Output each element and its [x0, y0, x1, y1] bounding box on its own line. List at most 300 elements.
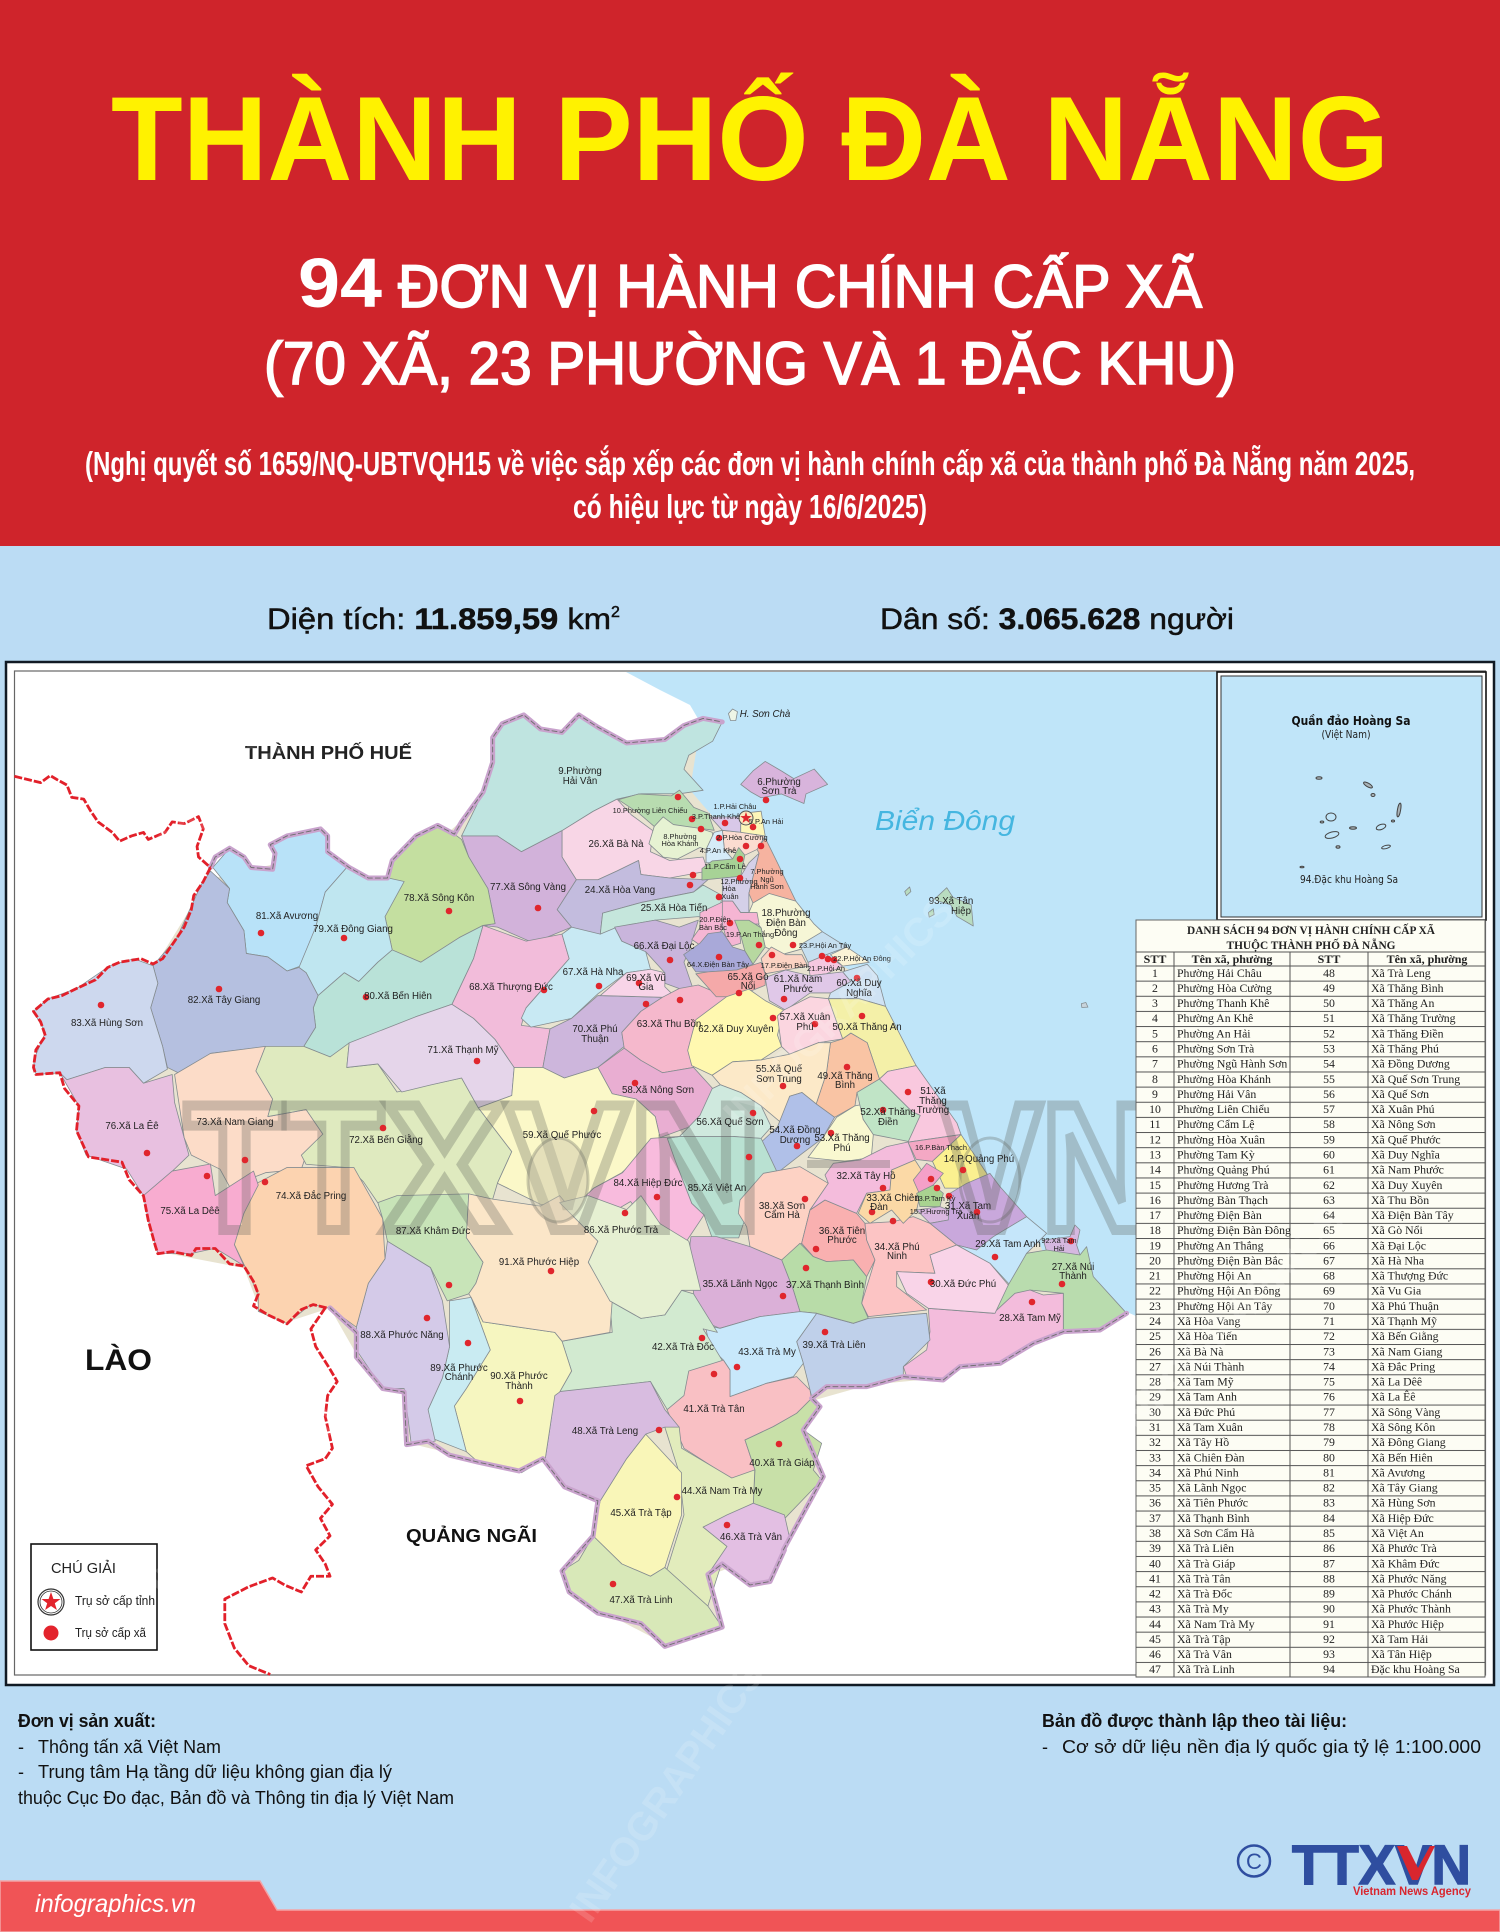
commune labels: Bình: [835, 1080, 855, 1091]
faint watermark: INFOGRAPHICS: INFOGRAPHICS: [1105, 1198, 1353, 1446]
commune labels: Phú: [833, 1143, 851, 1154]
table rows: Phường Hội An Tây: [1177, 1299, 1272, 1313]
table rows: Xã Duy Nghĩa: [1371, 1147, 1441, 1161]
table rows: Xã Phước Thành: [1371, 1602, 1451, 1616]
table rows: 44: [1149, 1617, 1161, 1631]
commune list table: [1136, 920, 1485, 1678]
table rows: Xã Tam Hải: [1371, 1632, 1429, 1646]
commune labels: 43.Xã Trà My: [738, 1347, 796, 1358]
table rows: 47: [1149, 1662, 1161, 1676]
table rows: Xã Núi Thành: [1177, 1359, 1244, 1373]
commune labels: 52.Xã Thăng: [860, 1107, 916, 1118]
commune labels: 63.Xã Thu Bồn: [637, 1019, 701, 1030]
commune labels: 93.Xã Tân: [929, 896, 973, 907]
map source note: -: [1042, 1737, 1048, 1757]
commune labels: Xuân: [721, 892, 739, 901]
table rows: Xã Tây Giang: [1371, 1481, 1438, 1495]
table rows: Xã Avương: [1371, 1465, 1425, 1479]
commune labels: 40.Xã Trà Giáp: [749, 1458, 815, 1469]
subtitle line 2: (70 XÃ, 23 PHƯỜNG VÀ 1 ĐẶC KHU): [264, 330, 1236, 397]
commune labels: 38.Xã Sơn: [759, 1201, 805, 1212]
logo: TTXVN: C: [1246, 1849, 1262, 1874]
table rows: 64: [1323, 1208, 1335, 1222]
table rows: Phường Hội An Đông: [1177, 1284, 1281, 1298]
table rows: 13: [1149, 1147, 1161, 1161]
commune labels: 11.P.Cẩm Lệ: [704, 862, 746, 871]
commune labels: 25.Xã Hòa Tiến: [641, 903, 707, 914]
table rows: Phường Bàn Thạch: [1177, 1193, 1268, 1207]
neighbour labels: QUẢNG NGÃI: [406, 1525, 537, 1546]
table rows: Xã Trà Tân: [1177, 1571, 1231, 1585]
table rows: Xã La Dêê: [1371, 1375, 1422, 1389]
table rows: 15: [1149, 1178, 1161, 1192]
inset: Hoàng Sa archipelago: Quần đảo Hoàng Sa: [1292, 714, 1410, 728]
commune labels: 42.Xã Trà Đốc: [652, 1342, 714, 1353]
table rows: 36: [1149, 1496, 1161, 1510]
table rows: 21: [1149, 1269, 1161, 1283]
table rows: Phường Tam Kỳ: [1177, 1147, 1255, 1161]
watermark: TTXVN: TT: [185, 1067, 383, 1269]
commune labels: 65.Xã Gò: [728, 972, 768, 983]
table rows: 19: [1149, 1238, 1161, 1252]
table rows: 76: [1323, 1390, 1335, 1404]
table rows: Xã Đồng Dương: [1371, 1057, 1450, 1071]
commune labels: 53.Xã Thăng: [814, 1133, 870, 1144]
commune labels: 24.Xã Hòa Vang: [585, 885, 655, 896]
table rows: 24: [1149, 1314, 1161, 1328]
table rows: 4: [1152, 1011, 1158, 1025]
subtitle line 1: ĐƠN VỊ HÀNH CHÍNH CẤP XÃ: [398, 253, 1202, 320]
table rows: Phường Liên Chiểu: [1177, 1102, 1270, 1116]
commune labels: Xuân: [957, 1211, 979, 1222]
legend: Trụ sở cấp tỉnh: [75, 1593, 155, 1608]
commune labels: 18.Phường: [762, 908, 810, 919]
commune labels: Thành: [505, 1381, 533, 1392]
table header row: STT: [1144, 952, 1166, 966]
commune labels: Đàn: [870, 1202, 888, 1213]
inset: Hoàng Sa archipelago: 94.Đặc khu Hoàng Sa: [1300, 874, 1398, 886]
table rows: Xã Thăng Bình: [1371, 981, 1444, 995]
commune labels: 5.P.An Hải: [749, 817, 784, 826]
production credits: Thông tấn xã Việt Nam: [38, 1737, 221, 1757]
watermark: TTXVN: [185, 1067, 1150, 1269]
table rows: Phường Điện Bàn: [1177, 1208, 1262, 1222]
map source note: [1042, 1711, 1481, 1757]
production credits: -: [18, 1737, 24, 1757]
table rows: 40: [1149, 1556, 1161, 1570]
land base silhouette: [35, 727, 1120, 1644]
map source note: Bản đồ được thành lập theo tài liệu:: [1042, 1711, 1347, 1731]
commune labels: 54.Xã Đồng: [769, 1125, 821, 1136]
table rows: Xã Thăng Phú: [1371, 1042, 1439, 1056]
table rows: Xã Quế Sơn Trung: [1371, 1072, 1460, 1086]
commune labels: Sơn Trung: [756, 1074, 802, 1085]
table rows: 79: [1323, 1435, 1335, 1449]
table rows: 84: [1323, 1511, 1335, 1525]
table rows: Xã Hà Nha: [1371, 1253, 1425, 1267]
commune labels: 82.Xã Tây Giang: [188, 995, 260, 1006]
commune labels: 49.Xã Thăng: [817, 1071, 873, 1082]
table rows: Xã Bến Giằng: [1371, 1329, 1439, 1343]
table rows: Phường Hội An: [1177, 1269, 1251, 1283]
commune labels: Bàn Bắc: [699, 923, 727, 932]
commune labels: Cẩm Hà: [764, 1210, 800, 1221]
table rows: Xã Vu Gia: [1371, 1284, 1422, 1298]
legend: [31, 1544, 157, 1650]
commune labels: Hòa Khánh: [662, 839, 698, 848]
table rows: Xã Đông Giang: [1371, 1435, 1446, 1449]
table rows: 45: [1149, 1632, 1161, 1646]
table rows: 78: [1323, 1420, 1335, 1434]
table rows: 63: [1323, 1193, 1335, 1207]
commune labels: 62.Xã Duy Xuyên: [698, 1024, 774, 1035]
table rows: 32: [1149, 1435, 1161, 1449]
production credits: thuộc Cục Đo đạc, Bản đồ và Thông tin địa lý Việt Nam: [18, 1788, 454, 1808]
table rows: 54: [1323, 1057, 1335, 1071]
table rows: Xã Trà Linh: [1177, 1662, 1235, 1676]
table rows: Xã Hiệp Đức: [1371, 1511, 1434, 1525]
commune labels: 17.P.Điện Bàn: [761, 961, 807, 970]
commune labels: Ninh: [887, 1251, 907, 1262]
commune labels: 36.Xã Tiên: [819, 1226, 865, 1237]
table rows: Xã Thu Bồn: [1371, 1193, 1429, 1207]
commune labels: 37.Xã Thạnh Bình: [786, 1280, 864, 1291]
production credits: -: [18, 1762, 24, 1782]
logo: TTXVN: TTXVN: [1292, 1833, 1471, 1896]
commune labels: 83.Xã Hùng Sơn: [71, 1018, 143, 1029]
table rows: 61: [1323, 1163, 1335, 1177]
commune labels: 57.Xã Xuân: [780, 1012, 830, 1023]
commune labels: 59.Xã Quế Phước: [523, 1130, 601, 1141]
commune regions: west and north: [33, 715, 727, 1208]
table rows: Phường An Thắng: [1177, 1238, 1264, 1252]
commune labels: 92.Xã Tam: [1041, 1236, 1077, 1245]
table rows: 65: [1323, 1223, 1335, 1237]
production credits: Trung tâm Hạ tầng dữ liệu không gian địa lý: [38, 1762, 392, 1782]
table rows: Phường Sơn Trà: [1177, 1042, 1255, 1056]
map source note: Cơ sở dữ liệu nền địa lý quốc gia tỷ lệ 1:100.000: [1062, 1737, 1481, 1757]
table rows: 68: [1323, 1269, 1335, 1283]
commune labels: Hành Sơn: [750, 882, 784, 891]
table rows: 29: [1149, 1390, 1161, 1404]
table rows: Xã Tân Hiệp: [1371, 1647, 1432, 1661]
table rows: Xã Hòa Tiến: [1177, 1329, 1237, 1343]
table rows: Xã Phước Trà: [1371, 1541, 1437, 1555]
commune labels: 79.Xã Đông Giang: [313, 924, 393, 935]
table rows: Xã Thạnh Mỹ: [1371, 1314, 1437, 1328]
table rows: Xã Trà Giáp: [1177, 1556, 1235, 1570]
commune labels: Dương: [780, 1135, 810, 1146]
table rows: 56: [1323, 1087, 1335, 1101]
table rows: 41: [1149, 1571, 1161, 1585]
table rows: Xã Hòa Vang: [1177, 1314, 1240, 1328]
production credits: Đơn vị sản xuất:: [18, 1711, 156, 1731]
table rows: Phường Hải Vân: [1177, 1087, 1256, 1101]
table rows: 33: [1149, 1450, 1161, 1464]
table rows: Phường Hòa Cường: [1177, 981, 1272, 995]
commune labels: Điền: [878, 1117, 898, 1128]
commune labels: 28.Xã Tam Mỹ: [999, 1313, 1061, 1324]
table title: DANH SÁCH 94 ĐƠN VỊ HÀNH CHÍNH CẤP XÃ: [1187, 922, 1435, 937]
table rows: Xã Bà Nà: [1177, 1344, 1224, 1358]
commune labels: 74.Xã Đắc Pring: [276, 1191, 346, 1202]
commune labels: 9.Phường: [558, 766, 602, 777]
bottom band with infographics.vn tab: [0, 1881, 1500, 1932]
commune labels: Hiệp: [951, 906, 971, 917]
table rows: 57: [1323, 1102, 1335, 1116]
table rows: 22: [1149, 1284, 1161, 1298]
table rows: Phường Hải Châu: [1177, 966, 1262, 980]
area statistic: Diện tích: 11.859,59 km: [267, 603, 611, 636]
commune labels: 70.Xã Phú: [572, 1024, 618, 1035]
table rows: 3: [1152, 996, 1158, 1010]
commune labels: 34.Xã Phú: [874, 1242, 920, 1253]
faint watermark: INFOGRAPHICS: INFOGRAPHICS: [561, 1654, 773, 1930]
commune labels: 44.Xã Nam Trà My: [682, 1486, 763, 1497]
commune labels: 21.P.Hội An: [807, 964, 845, 973]
table rows: Xã Trà Vân: [1177, 1647, 1232, 1661]
table rows: 72: [1323, 1329, 1335, 1343]
border lines: north province boundary and Laos border: [14, 715, 722, 1324]
commune labels: 75.Xã La Dêê: [160, 1206, 220, 1217]
table rows: Phường An Hải: [1177, 1026, 1251, 1040]
table rows: 80: [1323, 1450, 1335, 1464]
table header row: [1144, 952, 1467, 966]
table rows: 87: [1323, 1556, 1335, 1570]
commune labels: 55.Xã Quế: [756, 1064, 803, 1075]
commune labels: 27.Xã Núi: [1052, 1262, 1094, 1273]
table rows: Xã Trà Leng: [1371, 966, 1431, 980]
commune labels: 81.Xã Avương: [256, 911, 318, 922]
commune labels: Sơn Trà: [762, 786, 797, 797]
table rows: 60: [1323, 1147, 1335, 1161]
commune seat dots: [98, 794, 1074, 1587]
map frame: [6, 662, 1494, 1685]
commune labels: Chánh: [445, 1372, 473, 1383]
table rows: 90: [1323, 1602, 1335, 1616]
faint watermark: INFOGRAPHICS: INFOGRAPHICS: [715, 888, 963, 1136]
table rows: Xã Tam Mỹ: [1177, 1375, 1234, 1389]
subtitle line 1: 94: [298, 244, 382, 322]
table rows: 6: [1152, 1042, 1158, 1056]
commune labels: 4.P.An Khê: [700, 846, 736, 855]
commune labels: 33.Xã Chiên: [866, 1193, 920, 1204]
commune regions: south-east: [667, 1142, 1127, 1520]
table rows: Xã Đức Phú: [1177, 1405, 1235, 1419]
commune labels: Ngũ: [760, 875, 774, 884]
table rows: 88: [1323, 1571, 1335, 1585]
table rows: Xã Phước Năng: [1371, 1571, 1447, 1585]
inset: Hoàng Sa archipelago: [1217, 672, 1486, 920]
commune labels: 90.Xã Phước: [490, 1371, 548, 1382]
table rows: Xã Nam Phước: [1371, 1163, 1444, 1177]
commune labels: 85.Xã Việt An: [688, 1183, 746, 1194]
commune labels: 87.Xã Khâm Đức: [396, 1226, 470, 1237]
table rows: 27: [1149, 1359, 1161, 1373]
faint watermark: INFOGRAPHICS: INFOGRAPHICS: [140, 1358, 388, 1606]
table rows: 34: [1149, 1465, 1161, 1479]
commune labels: [71, 709, 1094, 1606]
table header row: Tên xã, phường: [1192, 952, 1272, 966]
table rows: 12: [1149, 1132, 1161, 1146]
commune labels: Hòa: [722, 884, 737, 893]
commune labels: 72.Xã Bến Giằng: [349, 1135, 423, 1146]
table rows: 93: [1323, 1647, 1335, 1661]
table rows: Xã Tiên Phước: [1177, 1496, 1248, 1510]
table rows: Phường An Khê: [1177, 1011, 1253, 1025]
area statistic: 2: [611, 604, 620, 621]
commune labels: 8.Phường: [663, 832, 697, 841]
table rows: Xã Thăng Điền: [1371, 1026, 1444, 1040]
commune labels: 77.Xã Sông Vàng: [490, 882, 566, 893]
table rows: Phường Hòa Xuân: [1177, 1132, 1265, 1146]
commune labels: 29.Xã Tam Anh: [975, 1239, 1041, 1250]
commune labels: Nghĩa: [846, 988, 873, 999]
commune labels: 76.Xã La Êê: [105, 1121, 159, 1132]
commune labels: 47.Xã Trà Linh: [609, 1595, 673, 1606]
watermark: TTXVN: XVN: [383, 1067, 762, 1269]
commune labels: 16.P.Bàn Thạch: [915, 1143, 967, 1152]
table rows: 20: [1149, 1253, 1161, 1267]
commune labels: 14.P.Quảng Phú: [944, 1154, 1014, 1165]
table rows: 58: [1323, 1117, 1335, 1131]
table rows: Xã Đại Lộc: [1371, 1238, 1426, 1252]
commune labels: 12.Phường: [720, 877, 758, 886]
header panel: [0, 0, 1500, 546]
commune labels: 10.Phường Liên Chiểu: [613, 806, 687, 815]
sea label: Biển Đông: Biển Đông: [875, 805, 1015, 836]
table rows: Xã Phước Hiệp: [1371, 1617, 1444, 1631]
commune labels: 66.Xã Đại Lộc: [634, 941, 695, 952]
table rows: 46: [1149, 1647, 1161, 1661]
table rows: 52: [1323, 1026, 1335, 1040]
commune labels: 7.Phường: [750, 867, 784, 876]
table rows: Xã Gò Nổi: [1371, 1223, 1423, 1237]
table rows: 81: [1323, 1465, 1335, 1479]
neighbour labels: LÀO: [85, 1343, 152, 1377]
commune labels: 84.Xã Hiệp Đức: [614, 1178, 683, 1189]
table rows: 28: [1149, 1375, 1161, 1389]
table rows: 5: [1152, 1026, 1158, 1040]
table rows: 62: [1323, 1178, 1335, 1192]
commune labels: Đông: [774, 928, 798, 939]
commune labels: 67.Xã Hà Nha: [563, 967, 624, 978]
commune labels: 26.Xã Bà Nà: [589, 839, 644, 850]
table rows: 2: [1152, 981, 1158, 995]
table rows: Xã Thượng Đức: [1371, 1269, 1448, 1283]
table rows: 11: [1149, 1117, 1161, 1131]
table rows: 69: [1323, 1284, 1335, 1298]
commune labels: 46.Xã Trà Vân: [720, 1532, 782, 1543]
table rows: 39: [1149, 1541, 1161, 1555]
table rows: Xã Nông Sơn: [1371, 1117, 1436, 1131]
table rows: Phường Ngũ Hành Sơn: [1177, 1057, 1287, 1071]
commune labels: 45.Xã Trà Tập: [610, 1508, 672, 1519]
table rows: Phường Hòa Khánh: [1177, 1072, 1271, 1086]
table rows: Phường Thanh Khê: [1177, 996, 1269, 1010]
commune labels: 69.Xã Vũ: [626, 973, 666, 984]
table rows: 16: [1149, 1193, 1161, 1207]
table rows: Xã Hùng Sơn: [1371, 1496, 1436, 1510]
table rows: Xã Tam Xuân: [1177, 1420, 1243, 1434]
commune labels: 88.Xã Phước Năng: [360, 1330, 444, 1341]
resolution note: có hiệu lực từ ngày 16/6/2025): [573, 488, 927, 525]
table rows: Xã Sơn Cẩm Hà: [1177, 1526, 1255, 1540]
table rows: 70: [1323, 1299, 1335, 1313]
table rows: 86: [1323, 1541, 1335, 1555]
table rows: 37: [1149, 1511, 1161, 1525]
faint watermark: INFOGRAPHICS: [53, 713, 1353, 1930]
commune labels: 86.Xã Phước Trà: [584, 1225, 659, 1236]
table rows: Xã Thăng An: [1371, 996, 1434, 1010]
table rows: 83: [1323, 1496, 1335, 1510]
icons: islands: [1300, 777, 1402, 868]
table rows: 9: [1152, 1087, 1158, 1101]
commune labels: Phước: [827, 1235, 857, 1246]
table rows: 53: [1323, 1042, 1335, 1056]
table rows: Phường Điện Bàn Đông: [1177, 1223, 1291, 1237]
border lines: south-east province boundary: [783, 1313, 1127, 1550]
commune labels: 32.Xã Tây Hồ: [836, 1171, 896, 1182]
table rows: Xã Đắc Pring: [1371, 1359, 1435, 1373]
commune labels: 20.P.Điện: [699, 915, 731, 924]
commune labels: 91.Xã Phước Hiệp: [499, 1257, 579, 1268]
population statistic: Dân số: 3.065.628 người: [880, 603, 1234, 636]
commune labels: 80.Xã Bến Hiên: [364, 991, 432, 1002]
title: THÀNH PHỐ ĐÀ NẴNG: [111, 72, 1389, 206]
table rows: Xã Thạnh Bình: [1177, 1511, 1250, 1525]
table rows: 14: [1149, 1163, 1161, 1177]
commune labels: 6.Phường: [757, 777, 801, 788]
table rows: Xã Trà Tập: [1177, 1632, 1231, 1646]
commune labels: Nổi: [741, 981, 755, 992]
table rows: Xã La Êê: [1371, 1390, 1416, 1404]
commune labels: 48.Xã Trà Leng: [572, 1426, 638, 1437]
table rows: 30: [1149, 1405, 1161, 1419]
table rows: 26: [1149, 1344, 1161, 1358]
table rows: Xã Tây Hồ: [1177, 1435, 1229, 1449]
table rows: 42: [1149, 1587, 1161, 1601]
commune labels: Thành: [1059, 1271, 1087, 1282]
commune labels: 41.Xã Trà Tân: [683, 1404, 745, 1415]
table rows: 85: [1323, 1526, 1335, 1540]
table rows: Đặc khu Hoàng Sa: [1371, 1662, 1461, 1676]
commune labels: 78.Xã Sông Kôn: [404, 893, 474, 904]
commune labels: 13.P.Tam Kỳ: [915, 1194, 956, 1203]
commune labels: 51.Xã: [920, 1086, 946, 1097]
commune labels: 68.Xã Thượng Đức: [469, 982, 553, 993]
watermark: TTXVN: VN: [941, 1067, 1150, 1269]
table rows: Xã Khâm Đức: [1371, 1556, 1440, 1570]
table rows: Xã Sông Kôn: [1371, 1420, 1435, 1434]
table rows: Xã Trà My: [1177, 1602, 1229, 1616]
table rows: Xã Xuân Phú: [1371, 1102, 1435, 1116]
faint watermark: INFOGRAPHICS: INFOGRAPHICS: [53, 713, 301, 961]
commune labels: 60.Xã Duy: [836, 978, 882, 989]
commune labels: 1.P.Hải Châu: [713, 802, 757, 811]
commune labels: 31.Xã Tam: [945, 1201, 991, 1212]
table rows: Phường Điện Bàn Bắc: [1177, 1253, 1283, 1267]
border lines: south province boundary and Laos–Quảng Ngãi border: [225, 1308, 784, 1674]
table rows: Phường Cẩm Lệ: [1177, 1117, 1255, 1131]
table rows: Xã Trà Liên: [1177, 1541, 1234, 1555]
table rows: Xã Bến Hiên: [1371, 1450, 1433, 1464]
table rows: [1149, 966, 1461, 1676]
commune labels: 2.P.Hòa Cường: [716, 833, 768, 842]
resolution note: [85, 444, 1415, 525]
table rows: 74: [1323, 1359, 1335, 1373]
table rows: Xã Trà Đốc: [1177, 1587, 1232, 1601]
